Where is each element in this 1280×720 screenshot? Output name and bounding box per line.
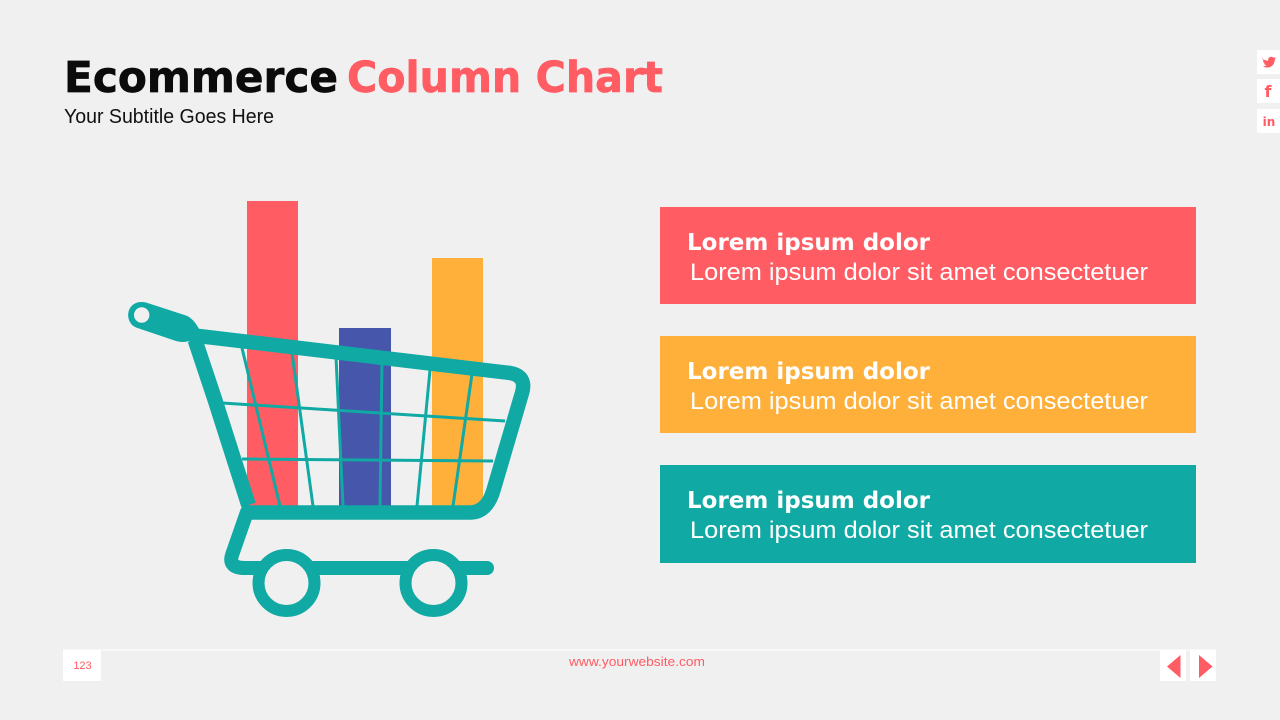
title bbox=[64, 53, 663, 103]
title: Ecommerce bbox=[64, 53, 338, 103]
panel: red text box: Lorem ipsum dolor sit amet consectetuer bbox=[690, 259, 1148, 286]
cart wire basket bbox=[222, 348, 505, 506]
icon: linkedin: in bbox=[1263, 115, 1275, 129]
cart top rail and right side bbox=[190, 335, 523, 512]
panel: teal text box: Lorem ipsum dolor sit amet consectetuer bbox=[690, 517, 1148, 544]
cart undercarriage bbox=[231, 512, 487, 568]
social icons bbox=[1257, 50, 1280, 133]
cart left side bbox=[195, 340, 248, 505]
right wheel bbox=[406, 555, 462, 611]
panel: red text box: Lorem ipsum dolor bbox=[687, 230, 931, 256]
icon: facebook: f bbox=[1265, 82, 1273, 101]
page number: 123 bbox=[73, 660, 92, 672]
title: Column Chart bbox=[347, 53, 663, 103]
page number bbox=[63, 650, 101, 681]
bar: red column bbox=[247, 201, 298, 506]
website url: www.yourwebsite.com bbox=[568, 654, 705, 669]
cart handle bbox=[128, 302, 200, 342]
bar: orange column bbox=[432, 258, 483, 506]
bar: blue column bbox=[339, 328, 391, 506]
panel: orange text box: Lorem ipsum dolor sit amet consectetuer bbox=[690, 388, 1148, 415]
column chart in shopping cart bbox=[128, 201, 523, 611]
handle hole bbox=[134, 307, 149, 323]
panel: orange text box bbox=[660, 336, 1196, 433]
subtitle: Your Subtitle Goes Here bbox=[64, 106, 274, 128]
icon: shopping cart bbox=[128, 302, 523, 611]
panel: orange text box: Lorem ipsum dolor bbox=[687, 359, 931, 385]
left wheel bbox=[258, 555, 314, 611]
panel: red text box bbox=[660, 207, 1196, 304]
arrow: previous bbox=[1160, 650, 1186, 681]
panel: teal text box: Lorem ipsum dolor bbox=[687, 488, 931, 514]
arrow: next bbox=[1190, 650, 1216, 681]
panel: teal text box bbox=[660, 465, 1196, 563]
icon: twitter bbox=[1257, 50, 1280, 74]
